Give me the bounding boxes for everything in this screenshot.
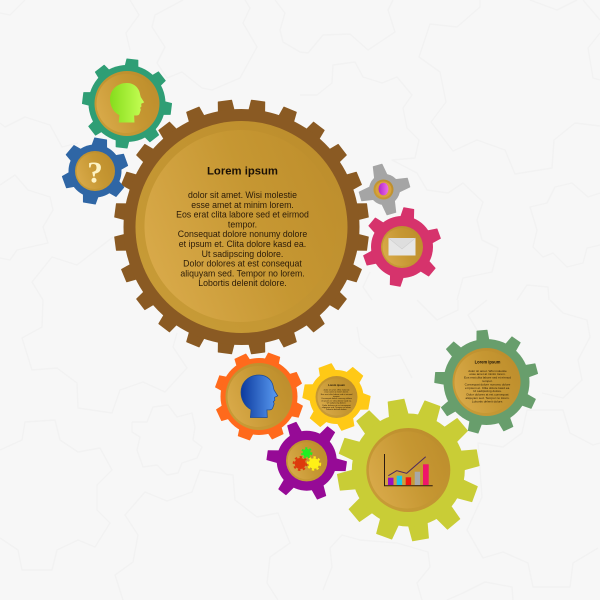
main body text: aliquyam sed. Tempor no lorem. [180,268,305,278]
icon: question mark: ? [87,154,103,190]
gear: green with head icon [82,59,172,148]
gear: purple with small gears [267,422,347,500]
gear: blue with question mark [62,138,128,204]
gear: gray with magenta dot [359,164,410,215]
yellow gear text: et ipsum et. Clita dolore kasd ea. [321,399,352,402]
yellow gear text: dolor sit amet. Wisi molestie [324,388,350,391]
sage gear text [464,360,511,403]
icon: blue head [241,375,278,417]
yellow gear text [321,383,353,411]
main body text: et ipsum et. Clita dolore kasd ea. [179,239,306,249]
bar chart [384,454,433,486]
main body text: Lobortis delenit dolore. [198,278,287,288]
yellow gear text: Dolor dolores at est consequat [322,404,351,407]
sage gear text: esse amet at minim lorem. [469,372,506,376]
main body text: Eos erat clita labore sed et eirmod [176,210,309,220]
main body text: dolor sit amet. Wisi molestie [188,190,297,200]
sage gear text: tempor. [482,379,493,383]
yellow gear text: Consequat dolore nonumy dolore [321,397,353,400]
yellow gear text: Ut sadipscing dolore. [327,402,347,405]
main body text: Consequat dolore nonumy dolore [178,229,307,239]
sage gear text: et ipsum et. Clita dolore kasd ea. [465,386,510,390]
sage gear text: Dolor dolores at est consequat [467,393,509,397]
gear: sage green with small text [435,330,538,433]
yellow gear text: aliquyam sed. Tempor no lorem. [322,406,352,409]
icon: envelope [388,238,416,256]
main body text: Dolor dolores at est consequat [183,259,302,269]
yellow gear text: Lorem ipsum [328,383,346,387]
icon: magenta drop [378,183,388,195]
sage gear text: aliquyam sed. Tempor no lorem. [466,396,510,400]
icon: green head [110,83,144,123]
sage gear text: Consequat dolore nonumy dolore [465,382,511,386]
sage gear text: Ut sadipscing dolore. [473,389,502,393]
main heading: Lorem ipsum [207,166,278,178]
sage gear text: Eos erat clita labore sed et eirmod [464,376,511,380]
yellow gear text: tempor. [333,395,340,398]
sage gear text: Lorem ipsum [475,360,501,365]
icon: small coloured gears [294,448,320,470]
gear: main brown text panel [115,100,368,354]
main body text: Ut sadipscing dolore. [202,249,283,259]
sage gear text: dolor sit amet. Wisi molestie [468,369,507,373]
yellow gear text: Eos erat clita labore sed et eirmod [321,393,353,396]
gear: pink with envelope [363,207,441,287]
gear: yellow with tiny text [303,363,370,431]
main body text: esse amet at minim lorem. [191,200,294,210]
yellow gear text: esse amet at minim lorem. [324,391,349,394]
gear: lime with bar chart [337,399,479,541]
main body text: tempor. [228,219,257,229]
sage gear text: Lobortis delenit dolore. [472,399,503,403]
main body text [176,190,309,288]
yellow gear text: Lobortis delenit dolore. [326,408,347,411]
gear: orange with blue head [215,353,303,440]
